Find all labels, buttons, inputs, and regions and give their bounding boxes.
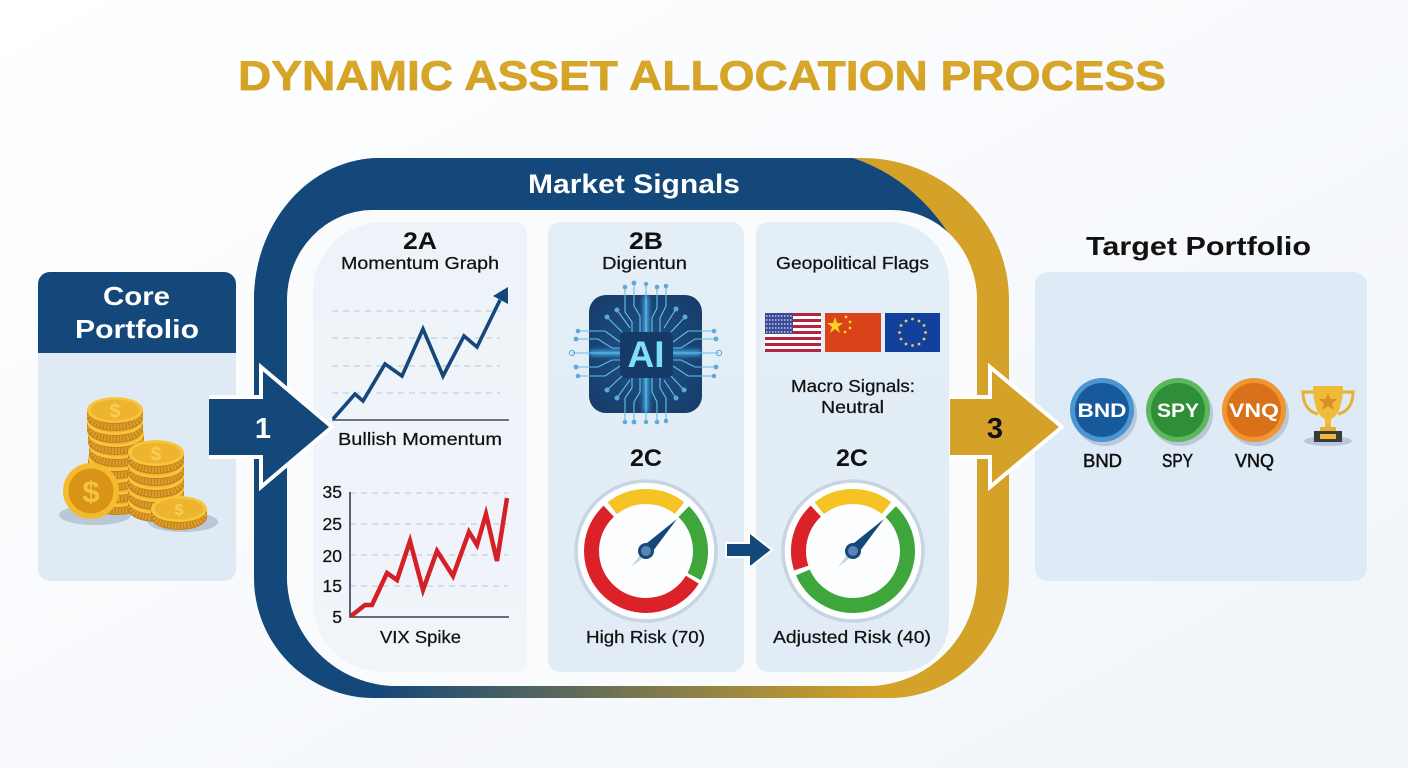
arrow: step 1: 1: [255, 413, 271, 445]
label: neutral: Neutral: [821, 397, 884, 417]
label: 2A: 2A: [403, 228, 437, 255]
label: 2C adjusted: 2C: [836, 445, 868, 472]
badge: BND: [1070, 378, 1137, 446]
label: SPY: SPY: [1162, 451, 1193, 471]
icon: AI chip: [569, 281, 722, 424]
label: 2C high risk: 2C: [630, 445, 662, 472]
icon: coin stacks: $: [151, 444, 162, 465]
icon: flag EU: [885, 313, 940, 352]
icon: coin stacks: [59, 397, 218, 532]
chart: VIX spike line: 15: [323, 576, 342, 596]
title: DYNAMIC ASSET ALLOCATION PROCESS: [238, 52, 1166, 99]
icon: flag China: [825, 313, 881, 352]
badge: SPY: SPY: [1157, 401, 1199, 422]
label: digientun: Digientun: [602, 253, 687, 273]
chart: bullish momentum line: [332, 287, 509, 420]
arrow: step 3: 3: [987, 413, 1003, 445]
panel: 2B AI and high risk: [548, 222, 744, 672]
label: geopolitical flags: Geopolitical Flags: [776, 253, 929, 273]
heading: target portfolio: Target Portfolio: [1086, 231, 1311, 261]
icon: flag USA: [765, 313, 821, 352]
icon: AI chip: AI: [628, 334, 664, 375]
icon: coin stacks: $: [82, 474, 100, 509]
label: VNQ: VNQ: [1235, 451, 1274, 471]
label: VIX spike: VIX Spike: [380, 627, 461, 647]
arrow: step 3: [950, 367, 1062, 487]
label: adjusted risk 40: Adjusted Risk (40): [773, 627, 931, 647]
panel: target portfolio: [1035, 272, 1367, 581]
heading: market signals: Market Signals: [528, 169, 740, 199]
badge: VNQ: [1222, 378, 1289, 446]
icon: coin stacks: $: [175, 502, 184, 519]
heading: core portfolio: Core: [103, 281, 170, 311]
icon: trophy: [1303, 386, 1353, 446]
panel: geopolitical flags and adjusted risk: [756, 222, 949, 672]
panel: market signals frame: [254, 158, 1009, 698]
arrow: between gauges: [726, 532, 772, 568]
chart: VIX spike line: 25: [323, 514, 342, 534]
label: high risk 70: High Risk (70): [586, 627, 705, 647]
panel: 2A momentum and VIX: [313, 222, 527, 672]
panel: core portfolio: [38, 272, 236, 581]
chart: VIX spike line: [323, 482, 509, 627]
gauge: high risk: [569, 474, 723, 628]
label: bullish momentum: Bullish Momentum: [338, 429, 502, 449]
badge: VNQ: VNQ: [1229, 401, 1279, 422]
heading: core portfolio second line: Portfolio: [75, 314, 199, 344]
badge: BND: BND: [1078, 401, 1126, 422]
icon: coin stacks: $: [110, 401, 121, 422]
chart: VIX spike line: 20: [323, 546, 342, 566]
label: momentum graph: Momentum Graph: [341, 253, 499, 273]
label: macro signals: Macro Signals:: [791, 376, 915, 396]
label: BND: BND: [1083, 451, 1122, 471]
label: 2B: 2B: [629, 228, 663, 255]
arrow: step 1: [209, 367, 332, 487]
gauge: adjusted risk: [776, 474, 930, 628]
chart: VIX spike line: 5: [332, 607, 342, 627]
badge: SPY: [1146, 378, 1213, 446]
chart: VIX spike line: 35: [323, 482, 342, 502]
